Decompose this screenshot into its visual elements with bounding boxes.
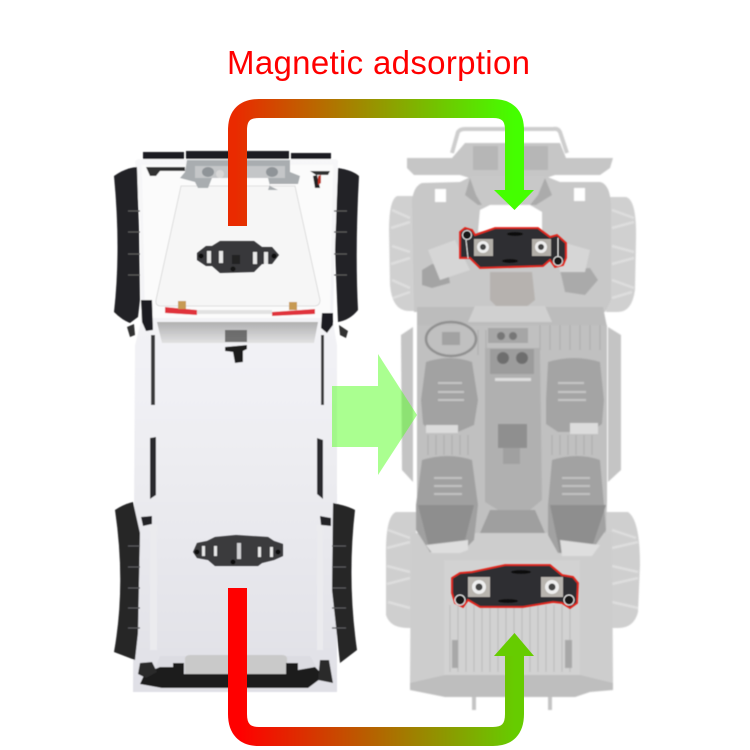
front tube bar [452, 129, 567, 153]
black hinge blocks [141, 300, 153, 331]
icon: rear magnet plate with red outline [452, 565, 578, 608]
left rear fender [114, 502, 140, 660]
rear side clips [141, 516, 331, 526]
hinge assembly [180, 160, 300, 190]
center console [485, 348, 542, 510]
white cut-outs [435, 189, 446, 202]
rear left tire [386, 512, 416, 628]
truck bed [410, 533, 613, 697]
fender ribs [128, 211, 347, 628]
cargo shade [150, 525, 323, 650]
floor ribs [428, 325, 600, 455]
tailgate window [155, 656, 318, 670]
firewall bar [417, 307, 607, 327]
icon: magnet plate on rear shell [193, 535, 283, 566]
front seats [421, 358, 478, 432]
brass tabs [178, 301, 186, 309]
top black rails [143, 151, 331, 160]
black T handle [225, 345, 247, 363]
right front fender [335, 168, 359, 322]
rear black bumper [140, 663, 324, 688]
hood window outline [156, 186, 320, 306]
left side board [401, 327, 413, 482]
rear right tire [606, 512, 640, 628]
left front fender [114, 167, 140, 323]
rear centre mount [480, 510, 545, 533]
icon: magnet plate on hood [197, 241, 279, 273]
small mirror clips [127, 324, 135, 337]
shell [133, 159, 338, 692]
inner pillars [151, 335, 324, 405]
red latches [165, 307, 197, 315]
arrow: translucent green transfer arrow [332, 354, 417, 475]
right rear fender [332, 503, 357, 663]
icon: front magnet plate with red outline [460, 228, 566, 268]
front right tire [606, 197, 636, 312]
rear seats [416, 456, 478, 552]
panel: car body shell seen from below [114, 151, 359, 692]
engine [490, 272, 535, 308]
dash and wheel [426, 322, 476, 356]
cab floor [417, 325, 607, 533]
right side board [608, 327, 621, 482]
bracket shadows [465, 178, 552, 205]
tire tread marks [387, 210, 638, 608]
panel: faded chassis interior [386, 129, 640, 710]
front bumper [407, 143, 613, 180]
front fender block [412, 176, 611, 312]
title: Magnetic adsorption [227, 44, 530, 81]
hood white panel [142, 165, 333, 318]
corner latches [146, 167, 330, 176]
cab window bar [157, 322, 318, 343]
arrow: top red to green flow [238, 108, 534, 226]
arrow: bottom red to green flow [238, 588, 534, 736]
front left tire [389, 196, 416, 311]
